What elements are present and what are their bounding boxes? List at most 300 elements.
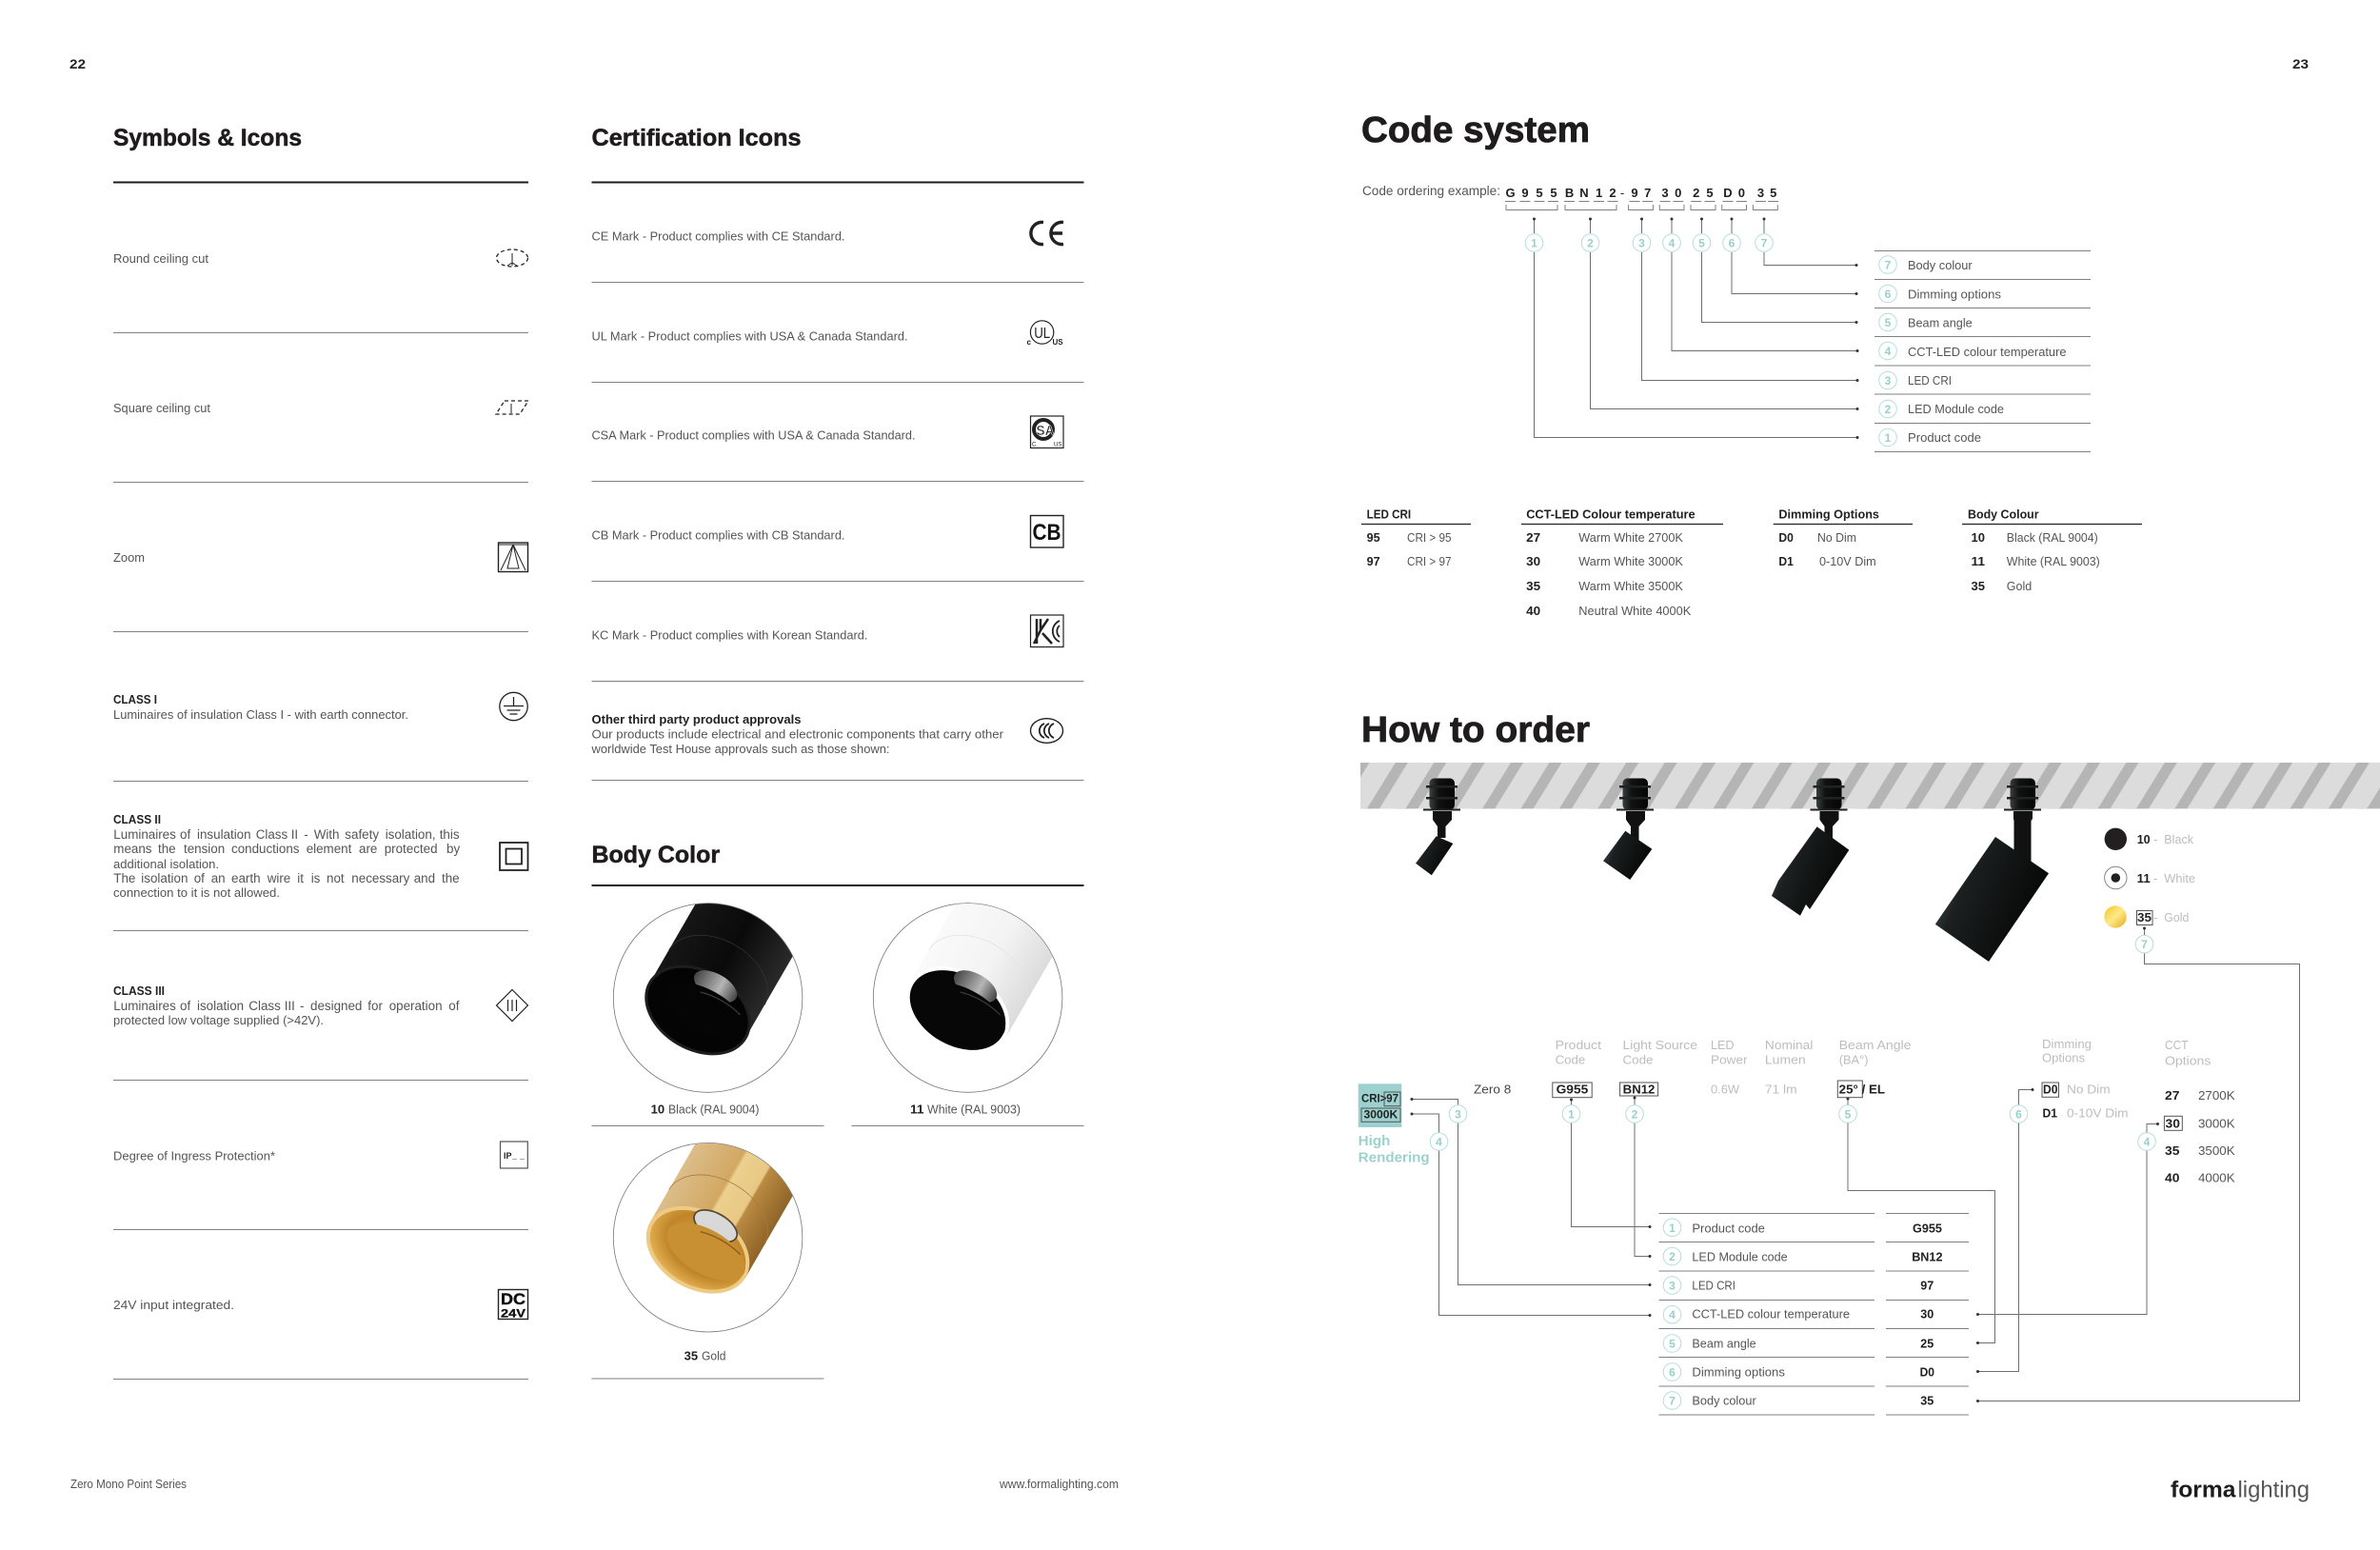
order row 1 — [1663, 1219, 1942, 1237]
page number 23: 23 — [2292, 56, 2309, 71]
legend row 5: 5 — [1885, 316, 1892, 329]
marker 6 — [2010, 1105, 2028, 1123]
footer: series name: Zero Mono Point Series — [70, 1477, 187, 1491]
icon: UL: c — [1026, 338, 1032, 347]
text: class II: is — [311, 871, 321, 885]
row: product data: Zero 8 — [1474, 1083, 1511, 1097]
text: class II: additional isolation. — [113, 857, 219, 871]
numbered marker 4: 4 — [1669, 236, 1676, 249]
legend row 1 — [1879, 428, 1981, 447]
icon: IP rating: IP — [504, 1151, 512, 1161]
text: class III — [113, 984, 460, 1027]
legend row 3 — [1879, 371, 1952, 389]
order row 2: LED Module code — [1692, 1249, 1788, 1263]
text: class III: Class — [248, 999, 281, 1013]
numbered marker 2: 2 — [1587, 236, 1594, 249]
text: class II: wire — [267, 871, 290, 885]
numbered marker 1: 1 — [1531, 236, 1537, 249]
options: CCT: 40 — [2165, 1171, 2179, 1185]
text: 24V input: 24V input integrated. — [113, 1298, 234, 1312]
icon: KC — [1030, 615, 1063, 647]
text: class III: isolation — [197, 999, 244, 1013]
order row 4: 30 — [1920, 1306, 1934, 1321]
badge: high rendering: Rendering — [1359, 1151, 1430, 1166]
icon: CSA: US — [1054, 442, 1061, 447]
legend row 6: Dimming options — [1908, 288, 2001, 301]
order row 7: Body colour — [1692, 1393, 1756, 1407]
text: other approvals — [591, 712, 1004, 756]
column labels: (BA°) — [1839, 1053, 1869, 1067]
text: class III: protected low voltage supplied (>42V). — [113, 1013, 324, 1027]
swatch: white: White — [2164, 871, 2195, 885]
heading: certification icons: Certification Icons — [592, 125, 802, 151]
column labels: Dimming — [2042, 1037, 2092, 1051]
table: LED CRI: CRI > 97 — [1407, 554, 1451, 568]
panel: code system — [1361, 110, 2142, 618]
icon: UL: US — [1053, 338, 1063, 347]
text: class II: earth — [231, 871, 261, 885]
text: class II: protected — [385, 842, 438, 856]
text: degree of ingress protection: Degree of Ingress Protection* — [113, 1148, 275, 1163]
text: class III: designed — [310, 999, 362, 1013]
legend row 5: Beam angle — [1908, 316, 1973, 329]
order row 6: D0 — [1920, 1364, 1934, 1379]
legend row 2: LED Module code — [1908, 402, 2004, 416]
column labels: CCT — [2165, 1038, 2189, 1052]
text: class II: tension — [184, 842, 225, 856]
code example characters: B — [1565, 186, 1574, 200]
code example characters: 3 — [1661, 186, 1669, 200]
text: class II: - — [304, 827, 308, 842]
order row 3: 3 — [1669, 1280, 1676, 1293]
legend row 3: LED CRI — [1908, 373, 1952, 388]
code example characters: G — [1506, 186, 1516, 200]
marker 2: 2 — [1632, 1108, 1638, 1122]
caption: white: White (RAL 9003) — [927, 1103, 1021, 1116]
text: class II: The — [113, 871, 135, 885]
row: product data: BN12 — [1623, 1083, 1655, 1097]
table: body colour: Gold — [2007, 579, 2032, 593]
text: class III: - — [300, 999, 304, 1013]
options: dimming — [2042, 1083, 2129, 1121]
text: class II: Class — [256, 827, 288, 842]
icon: CSA: SA — [1036, 423, 1055, 439]
column labels: Product — [1556, 1038, 1601, 1052]
order row 4: CCT-LED colour temperature — [1692, 1306, 1850, 1321]
options: CCT: 27 — [2165, 1088, 2179, 1103]
text: class II: it — [297, 871, 304, 885]
text: other approvals: worldwide Test House approvals such as those shown: — [591, 742, 889, 756]
legend row 4: CCT-LED colour temperature — [1908, 345, 2066, 359]
table: body colour: 10 — [1971, 530, 1985, 545]
code example characters: 5 — [1550, 186, 1557, 200]
text: CE mark: CE Mark - Product complies with CE Standard. — [592, 229, 845, 244]
text: class II: and — [414, 871, 435, 885]
icon: square ceiling cut — [496, 401, 528, 414]
column labels: Nominal — [1765, 1038, 1814, 1052]
order row 6: 6 — [1669, 1365, 1676, 1379]
marker 5 — [1839, 1105, 1856, 1123]
text: class I — [113, 692, 408, 722]
panel: body color — [592, 818, 1101, 1379]
table: LED CRI: 97 — [1367, 554, 1380, 568]
icon: CB: CB — [1032, 520, 1061, 546]
marker 5: 5 — [1845, 1108, 1852, 1122]
row: product data: G955 — [1557, 1083, 1588, 1097]
code example characters: 7 — [1644, 186, 1651, 200]
legend table: code parts — [1874, 251, 2091, 451]
text: class II — [113, 812, 460, 900]
options: CCT — [2164, 1088, 2235, 1185]
order row 6: Dimming options — [1692, 1364, 1785, 1379]
marker 6: 6 — [2015, 1108, 2022, 1122]
code example characters: 2 — [1693, 186, 1699, 200]
text: class II: conductions — [231, 842, 300, 856]
icon: UL — [1026, 321, 1063, 347]
order row 7 — [1663, 1392, 1934, 1409]
code example characters: 0 — [1738, 186, 1745, 200]
code example characters: D — [1723, 186, 1733, 200]
column labels: LED — [1711, 1038, 1735, 1052]
numbered marker 4 — [1663, 234, 1680, 251]
code example characters: - — [1620, 186, 1624, 200]
swatch: black — [2105, 828, 2193, 850]
column labels: Code — [1556, 1053, 1585, 1067]
text: class II: isolation, — [386, 827, 436, 842]
legend row 2 — [1879, 400, 2004, 418]
column labels: Power — [1711, 1053, 1748, 1067]
text: other approvals: Our products include electrical and electronic components that carry other — [592, 727, 1004, 741]
text: class II: the — [158, 842, 176, 856]
text: class II: With — [314, 827, 339, 842]
caption: gold — [684, 1348, 725, 1363]
table: LED CRI: LED CRI — [1367, 507, 1411, 522]
text: class III: CLASS III — [113, 984, 165, 998]
icon: round ceiling cut — [497, 249, 527, 267]
options: dimming: D1 — [2043, 1106, 2057, 1121]
marker 4 right — [2138, 1133, 2155, 1150]
legend row 3: 3 — [1885, 374, 1892, 388]
ceiling band hatching — [1360, 763, 2380, 809]
text: square ceiling cut: Square ceiling cut — [113, 401, 210, 415]
text: class II: safety — [345, 827, 379, 842]
fixture 3 — [1772, 779, 1849, 916]
table: CCT: Warm White 3000K — [1578, 554, 1683, 568]
table: body colour — [1962, 507, 2142, 593]
connector lines from code to legend — [1525, 219, 1857, 438]
heading: code system: Code system — [1361, 110, 1590, 150]
text: class II: are — [359, 842, 377, 856]
icon: zoom — [499, 543, 528, 571]
table: CCT: 35 — [1526, 579, 1540, 593]
icon: UL: UL — [1034, 326, 1051, 342]
table: CCT: 27 — [1526, 530, 1540, 545]
footer: website: www.formalighting.com — [999, 1477, 1119, 1491]
order summary table — [1658, 1213, 1969, 1415]
icon: class II double square — [500, 843, 527, 870]
text: UL mark: UL Mark - Product complies with USA & Canada Standard. — [592, 329, 908, 343]
legend row 4: 4 — [1885, 345, 1892, 358]
swatch: black: Black — [2164, 832, 2193, 846]
text: class II: insulation — [197, 827, 251, 842]
column labels: Options — [2165, 1054, 2211, 1068]
code example characters: 0 — [1675, 186, 1681, 200]
swatch: white: - — [2153, 871, 2157, 885]
text: class III: for — [367, 999, 383, 1013]
text: class I: CLASS I — [113, 692, 157, 706]
image: black body — [613, 903, 803, 1093]
marker 4 left: 4 — [1436, 1135, 1442, 1148]
text: class II: isolation — [141, 871, 188, 885]
page number 22: 22 — [69, 56, 86, 71]
image: gold body — [613, 1143, 803, 1333]
code example characters — [1505, 186, 1778, 209]
options: dimming: D0 — [2043, 1083, 2058, 1097]
marker 1: 1 — [1568, 1108, 1575, 1122]
table: body colour: White (RAL 9003) — [2007, 554, 2100, 568]
text: class II: an — [211, 871, 226, 885]
text: class II: the — [442, 871, 460, 885]
row: product data: 0.6W — [1711, 1083, 1740, 1097]
column labels: Options — [2042, 1051, 2085, 1065]
table: LED CRI — [1361, 507, 1471, 568]
text: class III: of — [180, 999, 190, 1013]
legend row 1: Product code — [1908, 430, 1981, 445]
icon: CSA: C — [1032, 442, 1037, 447]
code example characters: 5 — [1536, 186, 1543, 200]
swatch: gold — [2104, 905, 2189, 928]
table: dimming options: 0-10V Dim — [1819, 554, 1876, 568]
order row 3 — [1663, 1277, 1934, 1294]
text: class II: necessary — [351, 871, 410, 885]
column labels: Code — [1622, 1053, 1653, 1067]
order row 6 — [1663, 1363, 1934, 1381]
badge: high rendering: High — [1359, 1134, 1390, 1149]
text: class II: by — [446, 842, 460, 856]
order row 5: 25 — [1920, 1336, 1934, 1350]
heading: body color: Body Color — [592, 842, 720, 868]
options: CCT: 30 — [2165, 1116, 2180, 1130]
code example characters: 9 — [1521, 186, 1529, 200]
legend row 7: 7 — [1885, 259, 1892, 272]
numbered marker 5: 5 — [1698, 236, 1705, 249]
options: CCT: 3000K — [2198, 1116, 2235, 1130]
legend row 7: Body colour — [1908, 258, 1973, 272]
options: CCT: 2700K — [2198, 1088, 2235, 1103]
logo: formalighting: lighting — [2237, 1478, 2310, 1502]
swatch: black: 10 — [2137, 832, 2151, 846]
table: body colour: Black (RAL 9004) — [2007, 530, 2098, 545]
text: class II: means — [113, 842, 152, 856]
order row 3: 97 — [1920, 1278, 1934, 1292]
text: class I: Luminaires of insulation Class I - with earth connector. — [113, 707, 408, 722]
text: class III: III — [285, 999, 295, 1013]
icon: DC 24V — [499, 1289, 527, 1320]
swatch: white — [2105, 866, 2195, 889]
text: class II: of — [194, 871, 205, 885]
swatch: gold: - — [2153, 910, 2157, 924]
text: round ceiling cut: Round ceiling cut — [113, 251, 208, 266]
order row 2 — [1663, 1247, 1942, 1265]
panel: how to order — [1359, 710, 2380, 1415]
row: product data: 25° / EL — [1839, 1083, 1885, 1097]
marker 1 — [1562, 1105, 1580, 1123]
numbered marker 3: 3 — [1638, 236, 1645, 249]
badge: high rendering: CRI>97 — [1361, 1092, 1398, 1105]
image: white body — [872, 903, 1062, 1093]
order row 4 — [1663, 1305, 1934, 1323]
legend row 6: 6 — [1885, 288, 1892, 301]
order row 2: 2 — [1669, 1250, 1676, 1263]
table: dimming options: Dimming Options — [1778, 507, 1879, 522]
table: dimming options: D1 — [1778, 554, 1794, 568]
table: body colour: 11 — [1971, 554, 1985, 568]
legend row 7 — [1879, 256, 1973, 273]
marker 4 left — [1430, 1133, 1448, 1150]
numbered marker 2 — [1581, 234, 1599, 251]
order row 5: 5 — [1669, 1337, 1676, 1350]
table: CCT: 40 — [1526, 604, 1540, 618]
options: CCT: 3500K — [2198, 1143, 2235, 1158]
text: class III: of — [448, 999, 460, 1013]
order row 1: 1 — [1669, 1222, 1676, 1235]
order row 1: G955 — [1913, 1221, 1942, 1235]
heading: symbols and icons: Symbols & Icons — [113, 125, 302, 151]
swatch: black: - — [2153, 832, 2157, 846]
legend row 4 — [1879, 342, 2066, 360]
text: class II: connection to it is not allowed. — [113, 885, 280, 900]
text: code ordering example: Code ordering example: — [1362, 184, 1500, 198]
table: CCT: Neutral White 4000K — [1578, 604, 1692, 618]
numbered marker 3 — [1633, 234, 1651, 251]
icon: CE — [1031, 222, 1063, 245]
caption: black: 10 — [651, 1103, 664, 1116]
marker 2 — [1626, 1105, 1643, 1123]
text: class II: this — [440, 827, 460, 842]
numbered marker 6: 6 — [1729, 236, 1735, 249]
text: class II: of — [180, 827, 190, 842]
panel: certification icons — [591, 125, 1083, 781]
column labels: Light Source — [1622, 1038, 1697, 1052]
icon: class III diamond — [497, 990, 527, 1021]
connector lines — [1412, 928, 2300, 1401]
table: LED CRI: CRI > 95 — [1407, 530, 1451, 545]
legend row 2: 2 — [1885, 403, 1892, 416]
legend row 5 — [1879, 313, 1973, 331]
code example characters: 1 — [1596, 186, 1602, 200]
row: product data: 71 lm — [1765, 1083, 1797, 1097]
text: CB mark: CB Mark - Product complies with CB Standard. — [592, 527, 845, 543]
code example characters: 3 — [1757, 186, 1764, 200]
column labels: Lumen — [1765, 1053, 1806, 1067]
numbered marker 5 — [1693, 234, 1711, 251]
order row 1: Product code — [1692, 1221, 1765, 1235]
order row 5 — [1663, 1335, 1934, 1352]
code example characters: 5 — [1706, 186, 1714, 200]
logo: formalighting — [2171, 1478, 2310, 1502]
marker 4 right: 4 — [2144, 1135, 2151, 1148]
text: CSA mark: CSA Mark - Product complies with USA & Canada Standard. — [592, 428, 916, 442]
numbered marker 1 — [1525, 234, 1543, 251]
legend row 1: 1 — [1885, 431, 1892, 445]
text: class III: operation — [389, 999, 443, 1013]
table: body colour: 35 — [1971, 579, 1985, 593]
caption: gold: Gold — [702, 1348, 725, 1363]
icon: DC 24V: DC — [501, 1290, 526, 1308]
table: dimming options: No Dim — [1817, 530, 1856, 545]
panel: symbols and icons — [113, 125, 528, 1379]
icon: CCC — [1030, 719, 1062, 743]
table: CCT: Warm White 3500K — [1578, 579, 1683, 593]
numbered marker 6 — [1723, 234, 1740, 251]
code example characters: 5 — [1770, 186, 1776, 200]
fixture 2 — [1603, 779, 1654, 880]
text: class II: element — [307, 842, 352, 856]
caption: black: Black (RAL 9004) — [668, 1103, 760, 1116]
options: CCT: 35 — [2165, 1143, 2179, 1158]
logo: formalighting: forma — [2171, 1478, 2236, 1502]
column labels — [1556, 1037, 2211, 1068]
text: KC mark: KC Mark - Product complies with Korean Standard. — [592, 628, 868, 642]
text: other approvals: Other third party product approvals — [592, 712, 802, 726]
caption: white: 11 — [910, 1103, 923, 1116]
icon: CSA — [1030, 416, 1063, 447]
marker 7 — [2135, 935, 2153, 953]
table: dimming options: D0 — [1778, 530, 1794, 545]
table: LED CRI: 95 — [1367, 530, 1380, 545]
fixture 4 — [1935, 779, 2049, 962]
text: class II: Luminaires — [113, 827, 176, 842]
order row 4: 4 — [1669, 1308, 1676, 1321]
table: CCT — [1521, 507, 1723, 618]
icon: IP rating — [501, 1142, 527, 1168]
numbered marker 7: 7 — [1761, 236, 1768, 249]
caption: gold: 35 — [684, 1348, 698, 1363]
heading: how to order: How to order — [1361, 710, 1590, 750]
column labels: Beam Angle — [1839, 1038, 1912, 1052]
text: class II: II — [291, 827, 298, 842]
options: CCT: 4000K — [2198, 1171, 2235, 1185]
text: zoom: Zoom — [113, 550, 145, 565]
text: class II: CLASS II — [113, 812, 161, 826]
swatch: white: 11 — [2137, 871, 2151, 885]
order row 5: Beam angle — [1692, 1336, 1756, 1350]
swatch: gold: 35 — [2137, 910, 2152, 924]
icon: DC 24V: 24V — [501, 1306, 526, 1320]
table: CCT: CCT-LED Colour temperature — [1526, 507, 1696, 522]
marker 3 left — [1449, 1105, 1467, 1123]
code example characters: 2 — [1609, 186, 1616, 200]
table: body colour: Body Colour — [1968, 507, 2039, 522]
text: class III: Luminaires — [113, 999, 176, 1013]
icon: class I earth — [500, 692, 527, 721]
badge: high rendering — [1359, 1083, 1430, 1166]
numbered marker 7 — [1755, 234, 1773, 251]
table: dimming options — [1774, 507, 1913, 568]
options: dimming: No Dim — [2067, 1083, 2111, 1097]
table: CCT: 30 — [1526, 554, 1540, 568]
code example characters: 9 — [1631, 186, 1638, 200]
order row 3: LED CRI — [1692, 1278, 1735, 1292]
marker 7: 7 — [2141, 938, 2148, 951]
legend row 6 — [1879, 285, 2001, 303]
badge: high rendering: 3000K — [1363, 1107, 1398, 1121]
text: class II: not — [327, 871, 345, 885]
swatch list: body colours — [2104, 828, 2195, 928]
swatch: gold: Gold — [2164, 910, 2189, 924]
order row 7: 35 — [1920, 1393, 1934, 1407]
marker 3 left: 3 — [1455, 1108, 1461, 1122]
